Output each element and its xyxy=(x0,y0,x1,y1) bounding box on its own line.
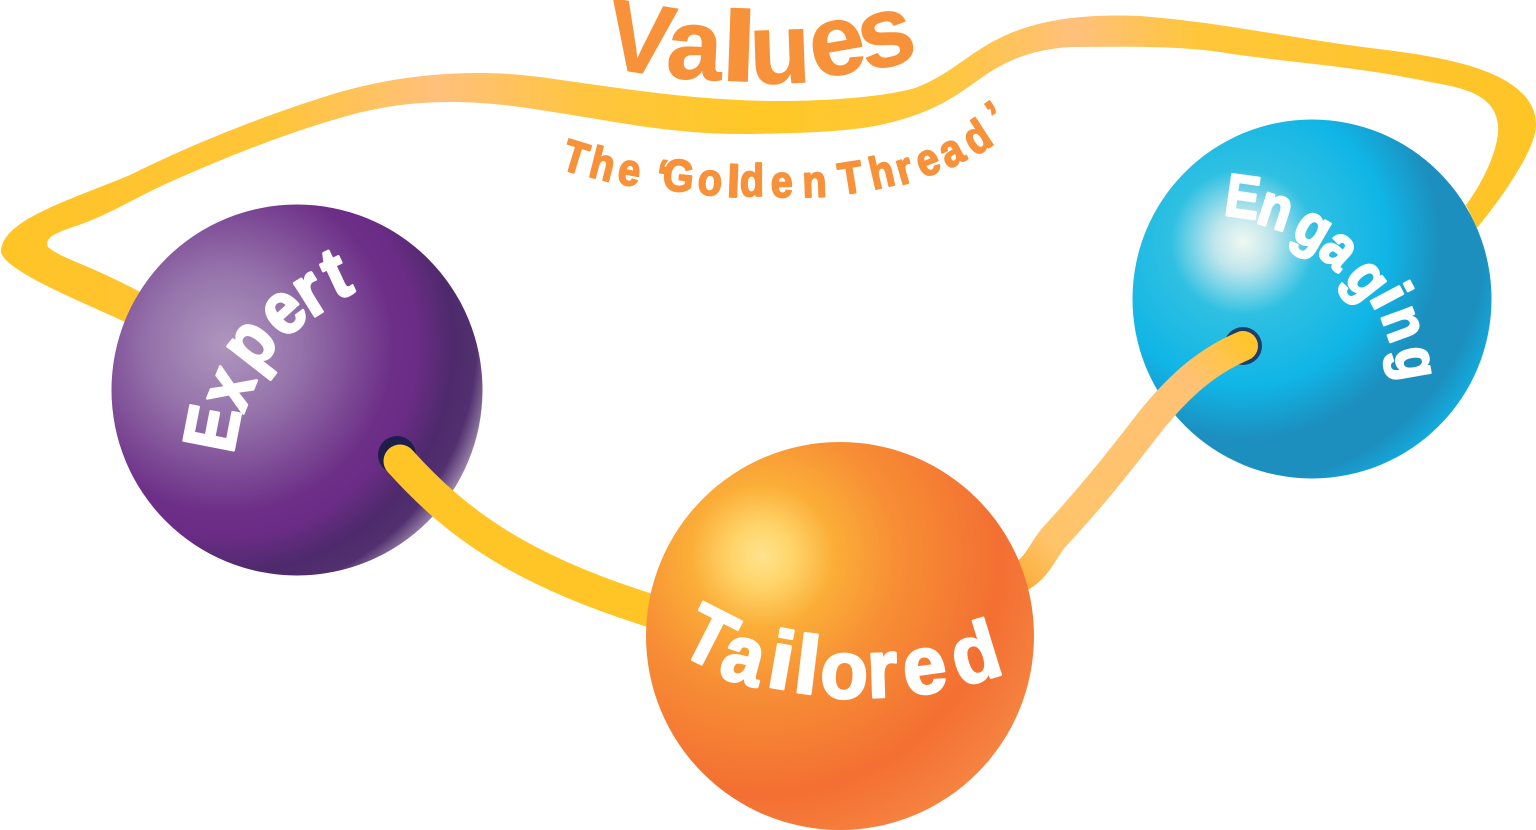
subheading: The Golden Thread: G xyxy=(661,149,697,202)
label: Expert xyxy=(167,230,363,458)
label: Tailored: a xyxy=(713,605,777,705)
label: Tailored: T xyxy=(669,585,751,688)
label: Engaging: g xyxy=(1284,190,1345,264)
subheading: The Golden Thread: h xyxy=(864,145,899,199)
label: Engaging: E xyxy=(1221,161,1264,232)
label: Expert: p xyxy=(202,301,293,384)
subheading: The Golden Thread: a xyxy=(929,123,973,178)
label: Tailored: o xyxy=(818,623,871,717)
subheading: The Golden Thread: e xyxy=(908,132,947,187)
label: Engaging xyxy=(1221,161,1453,384)
thread between Expert and Tailored xyxy=(400,461,665,615)
subheading: The Golden Thread: e xyxy=(614,143,645,196)
label: Engaging: g xyxy=(1382,341,1453,384)
subheading: The Golden Thread: n xyxy=(802,156,827,207)
label: Expert: r xyxy=(275,248,341,332)
label: Tailored: r xyxy=(865,623,899,715)
label: Tailored: i xyxy=(762,614,802,708)
label: Tailored: d xyxy=(939,602,1011,704)
label: Tailored xyxy=(669,585,1011,717)
subheading: The Golden Thread: d xyxy=(740,156,764,206)
subheading: The Golden Thread: h xyxy=(585,137,620,191)
heading: Values xyxy=(599,0,925,106)
subheading: The Golden Thread: d xyxy=(953,110,1000,165)
label: Engaging: g xyxy=(1333,245,1406,312)
label: Tailored: e xyxy=(896,617,952,713)
label: Engaging: i xyxy=(1358,272,1425,318)
subheading: The Golden Thread: ‘ xyxy=(653,150,671,201)
label: Tailored: l xyxy=(789,619,825,712)
upper golden thread xyxy=(1,16,1536,322)
hole in Engaging sphere xyxy=(1224,327,1262,365)
subheading: The Golden Thread xyxy=(557,92,1015,207)
label: Expert: E xyxy=(167,398,257,458)
label: Expert: t xyxy=(308,230,363,315)
subheading: The Golden Thread: r xyxy=(889,142,918,194)
sphere: Expert xyxy=(112,204,482,576)
label: Expert: e xyxy=(239,266,322,352)
subheading: The Golden Thread: T xyxy=(557,130,594,185)
sphere: Tailored xyxy=(646,442,1034,830)
label: Engaging: n xyxy=(1369,296,1442,350)
subheading: The Golden Thread: ’ xyxy=(977,92,1015,139)
subheading: The Golden Thread: l xyxy=(726,156,741,207)
sphere: Engaging xyxy=(1132,120,1492,478)
subheading: The Golden Thread: o xyxy=(696,154,724,205)
subheading: The Golden Thread: T xyxy=(835,151,867,204)
label: Engaging: a xyxy=(1308,213,1375,283)
thread between Tailored and Engaging xyxy=(1010,346,1243,582)
subheading: The Golden Thread: e xyxy=(770,156,793,207)
label: Expert: x xyxy=(181,355,272,420)
hole in Expert sphere xyxy=(378,436,416,474)
label: Engaging: n xyxy=(1251,171,1302,244)
